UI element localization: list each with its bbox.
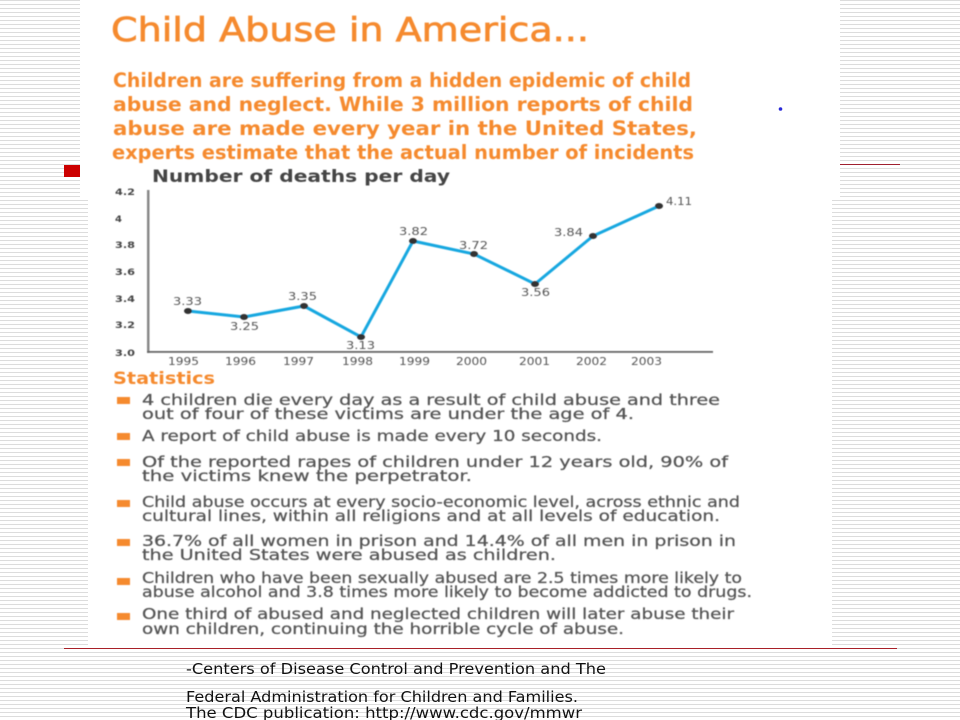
data values: 4.11 — [666, 195, 692, 208]
white panel: upper image — [80, 0, 840, 198]
bullet text: 36.7% of all women in prison and 14.4% of all men in prison in — [142, 532, 736, 550]
x axis labels: 2001 — [519, 355, 550, 368]
y axis — [147, 190, 713, 353]
y axis labels: 3.6 — [115, 268, 135, 278]
x axis labels: 2003 — [631, 355, 662, 368]
bullet text: abuse alcohol and 3.8 times more likely to become addicted to drugs. — [142, 583, 752, 601]
bullet text: Of the reported rapes of children under 12 years old, 90% of — [142, 453, 729, 471]
y axis labels: 4.2 — [115, 188, 135, 198]
source citation: Federal Administration for Children and Families. — [186, 688, 578, 706]
intro text block: abuse are made every year in the United States, — [113, 117, 697, 140]
bullet text: out of four of these victims are under the age of 4. — [142, 405, 634, 423]
title: Child Abuse in America... — [111, 10, 589, 49]
bullet text: cultural lines, within all religions and at all levels of education. — [142, 507, 720, 525]
x axis labels: 2000 — [456, 355, 487, 368]
data values: 3.13 — [346, 339, 375, 352]
x axis labels: 1996 — [225, 355, 256, 368]
data values — [173, 195, 692, 352]
x axis labels: 1999 — [399, 355, 430, 368]
data values: 3.72 — [459, 239, 488, 252]
data values: 3.82 — [399, 225, 428, 238]
red slide accent square — [64, 165, 80, 177]
x axis labels: 1997 — [283, 355, 314, 368]
y axis labels: 3.2 — [115, 321, 135, 331]
source citation — [185, 660, 606, 720]
data values: 3.84 — [554, 226, 583, 239]
bullet text: One third of abused and neglected children will later abuse their — [142, 605, 735, 623]
y axis labels: 3.8 — [115, 241, 135, 251]
data values: 3.56 — [521, 286, 550, 299]
data line — [188, 206, 659, 337]
statistics list — [117, 391, 752, 638]
blue dot — [779, 107, 782, 111]
data values: 3.35 — [288, 290, 317, 303]
bullet text: 4 children die every day as a result of child abuse and three — [142, 391, 720, 409]
bullet text: the victims knew the perpetrator. — [142, 467, 472, 485]
data values: 3.33 — [173, 295, 202, 308]
line chart — [115, 188, 713, 368]
y axis labels: 3.0 — [115, 349, 135, 359]
bullet text — [142, 391, 752, 638]
x axis labels: 1998 — [342, 355, 373, 368]
bullet text: own children, continuing the horrible cycle of abuse. — [142, 620, 624, 638]
intro text block: experts estimate that the actual number of incidents — [112, 141, 694, 164]
data points — [184, 203, 663, 340]
source citation: -Centers of Disease Control and Prevention and The — [186, 660, 606, 678]
intro text block: abuse and neglect. While 3 million reports of child — [113, 93, 693, 116]
x axis labels — [168, 355, 662, 368]
data values: 3.25 — [230, 320, 259, 333]
bullet text: Child abuse occurs at every socio-economic level, across ethnic and — [142, 493, 740, 511]
y axis labels — [115, 188, 135, 359]
intro text block — [112, 69, 697, 164]
x axis labels: 1995 — [168, 355, 199, 368]
bullet text: A report of child abuse is made every 10 seconds. — [142, 427, 602, 445]
y axis labels: 4 — [115, 215, 122, 225]
x axis labels: 2002 — [576, 355, 607, 368]
red rule lower — [64, 648, 897, 649]
bullet text: the United States were abused as children. — [142, 546, 556, 564]
intro text block: Children are suffering from a hidden epidemic of child — [113, 69, 691, 92]
white panel: lower image — [88, 198, 832, 646]
chart heading: Number of deaths per day — [152, 167, 450, 187]
y axis labels: 3.4 — [115, 295, 135, 305]
bullet text: Children who have been sexually abused are 2.5 times more likely to — [142, 569, 742, 587]
red rule upper right — [840, 164, 900, 165]
statistics heading: Statistics — [113, 369, 215, 389]
bullet markers — [117, 397, 130, 620]
